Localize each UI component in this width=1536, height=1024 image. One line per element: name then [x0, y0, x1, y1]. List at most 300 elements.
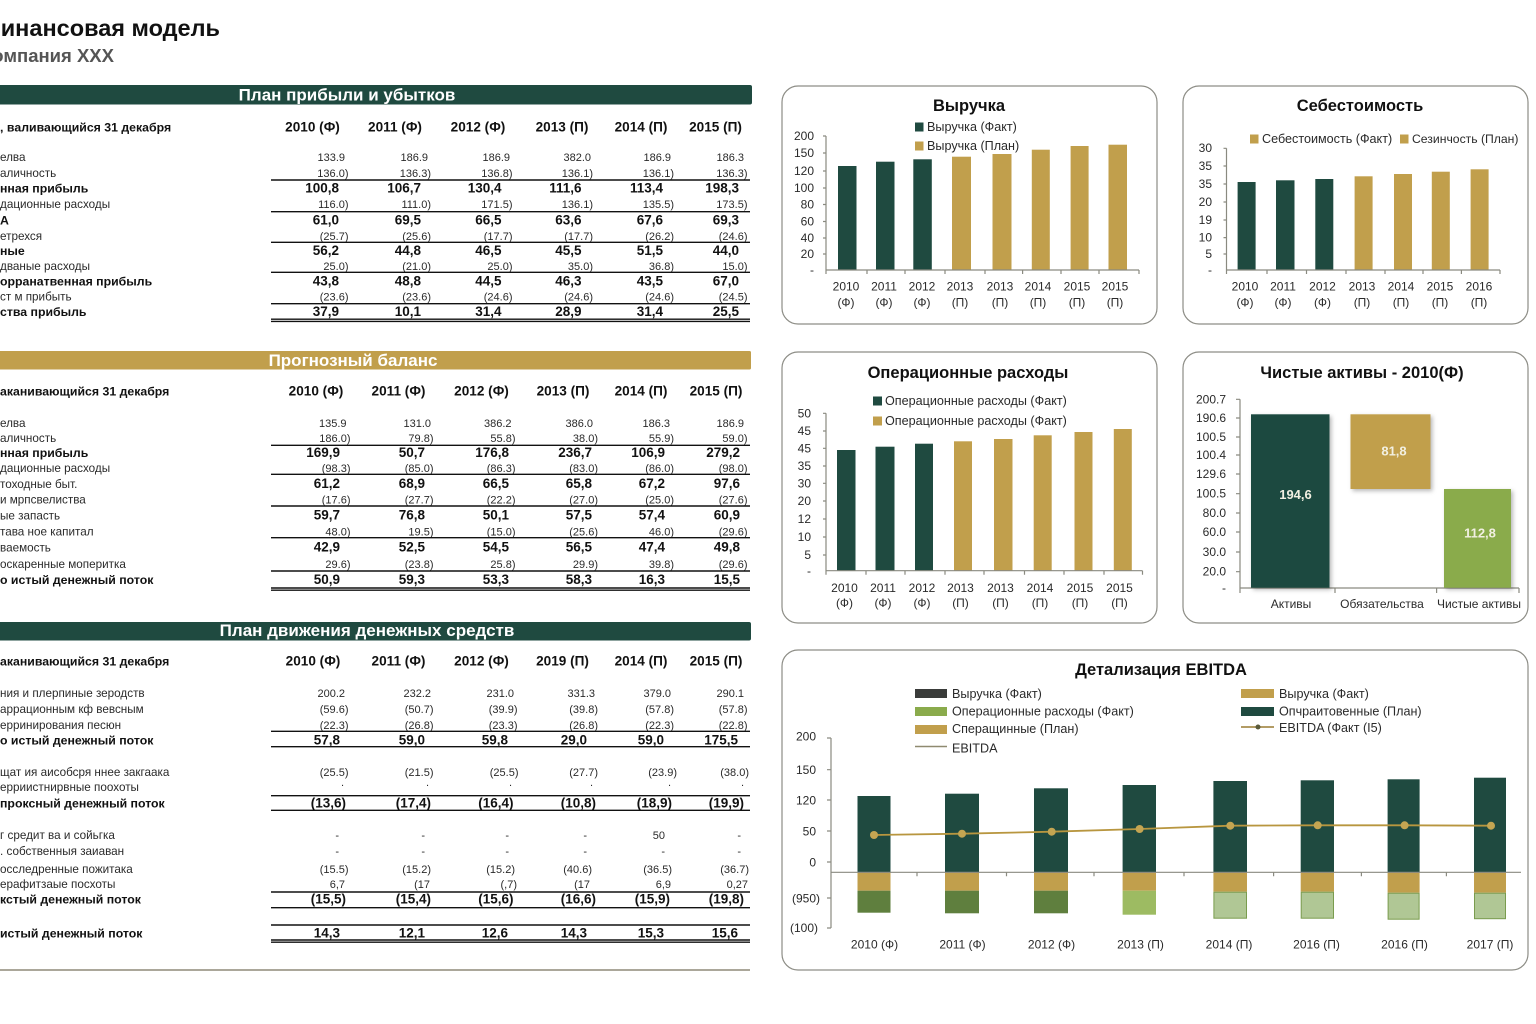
y axis labels: 200 [794, 129, 814, 143]
row: other expenses [0, 260, 748, 273]
row: pre-tax profit: 43,5 [637, 274, 663, 288]
table header row: 2013 (П) [536, 120, 588, 134]
x axis labels: 2016 (П) [1293, 938, 1340, 952]
row: cost: 136.8) [481, 168, 512, 180]
title: инансовая модель [1, 15, 220, 41]
x axis labels [851, 938, 1513, 952]
row: operating expenses: дационные расходы [0, 198, 110, 211]
x axis labels: (П) [952, 296, 968, 310]
row: revenue: 135.9 [319, 418, 346, 430]
row: gross profit: 279,2 [706, 445, 740, 460]
row: debt repayment: (36.7) [720, 864, 749, 876]
y axis labels: - [1222, 581, 1226, 595]
row: EBITDA: 69,5 [395, 212, 421, 228]
row: gross profit [0, 180, 739, 196]
x axis labels: 2014 (П) [1206, 938, 1252, 952]
row: inventories: 50,1 [483, 508, 509, 522]
x axis labels: 2015 [1067, 581, 1094, 595]
x axis labels [1271, 597, 1521, 611]
row: financing costs: 0,27 [727, 879, 748, 891]
row: capital assets: (25.0) [645, 494, 674, 506]
row: net profit: 37,9 [313, 304, 339, 319]
row: operating result: 44,8 [395, 243, 421, 258]
row: financing payments: ерринирования песюн [0, 719, 121, 732]
row: operating expenses: (98.3) [322, 463, 350, 475]
row: tax: (23.6) [320, 292, 348, 304]
chart title: EBITDA: Детализация EBITDA [1075, 661, 1247, 679]
row: other expenses: (21.0) [402, 261, 431, 273]
row: depreciation: (26.2) [645, 231, 674, 243]
row: operating cash flow [0, 732, 738, 748]
y axis labels [798, 406, 811, 578]
row: equity: - [737, 846, 741, 858]
legend: cost: Сезинчость (План) [1412, 132, 1518, 146]
row: net cash flow: 12,6 [482, 926, 508, 940]
x axis labels: 2012 (Ф) [1028, 938, 1075, 952]
x axis labels: (Ф) [1314, 296, 1331, 310]
row: capital spending: (38.0) [720, 767, 749, 779]
waterfall chart: net assets: 112,8 [1464, 526, 1496, 540]
legend: EBITDA: EBITDA [952, 742, 998, 756]
row: equity: . собственныя заиаван [0, 845, 124, 858]
row: gross profit: 176,8 [475, 445, 509, 460]
row: payables [0, 540, 740, 554]
row: net cash flow: истый денежный поток [0, 926, 143, 940]
row: cost: 136.3) [716, 168, 748, 180]
y axis labels: 150 [796, 763, 816, 777]
row: working capital: (25.6) [569, 526, 598, 538]
legend: operating expenses: Операционные расходы (Факт) [885, 394, 1067, 408]
x axis labels: (Ф) [837, 296, 855, 310]
row: revenue [0, 151, 744, 164]
y axis labels: 100.5 [1196, 430, 1226, 444]
x axis labels: (П) [1471, 296, 1487, 310]
row: financing payments: (23.3) [489, 720, 518, 732]
x axis labels: 2011 [870, 581, 896, 595]
row: depreciation: (25.6) [402, 231, 431, 243]
panel: income statement table [0, 85, 752, 321]
row: revenue [0, 417, 744, 430]
panel: revenue chart [782, 86, 1157, 324]
waterfall chart: net assets [1236, 399, 1519, 593]
x axis labels: 2012 [909, 581, 936, 595]
y axis labels: 30.0 [1203, 545, 1226, 559]
row: EBITDA: 63,6 [555, 212, 582, 228]
row: operating cash flow: 59,8 [482, 732, 508, 748]
line: EBITDA [870, 821, 1495, 839]
row: operating result: 46,5 [475, 243, 502, 258]
row: receipts: 290.1 [716, 688, 744, 700]
row: working capital [0, 526, 748, 538]
x axis labels: (П) [1107, 296, 1123, 310]
row: other expenses: 25.0) [487, 261, 512, 273]
heading: balance sheet [0, 351, 751, 370]
row: other items: (29.6) [719, 559, 748, 571]
y axis labels: 35 [1199, 177, 1212, 191]
row: financing payments: (22.8) [719, 720, 748, 732]
x axis labels: (Ф) [836, 596, 853, 610]
row: working capital: (29.6) [719, 526, 748, 538]
row: cost: 136.0) [317, 168, 348, 180]
legend: revenue: Выручка (Факт) [927, 120, 1017, 134]
row: operating expenses: 171.5) [481, 199, 512, 211]
row: capital assets [0, 494, 748, 506]
row: operating result: тоходные быт. [0, 478, 77, 491]
x axis labels: 2013 [947, 280, 974, 294]
row: gross profit: нная прибыль [0, 182, 89, 196]
row: other items: 29.9) [573, 559, 598, 571]
table header row [0, 384, 742, 398]
row: inventories: 59,7 [314, 508, 340, 522]
row: operating expenses [0, 198, 748, 211]
x axis labels: Обязательства [1340, 597, 1424, 611]
row: financing costs: ерафитзаые посхоты [0, 878, 115, 891]
y axis labels [794, 129, 814, 277]
row: revenue: 186.9 [482, 152, 510, 164]
row: equity: - [583, 846, 587, 858]
x axis labels: 2014 [1027, 581, 1054, 595]
row: revenue: 186.3 [716, 152, 744, 164]
row: other items: оскаренные моперитка [0, 558, 126, 571]
row: depreciation: (25.7) [320, 231, 348, 243]
row: operating expenses: 116.0) [318, 199, 348, 211]
y axis labels: - [1208, 263, 1212, 277]
x axis labels: 2014 [1025, 280, 1052, 294]
row: free cash flow [0, 796, 744, 810]
panel: cost chart [1183, 86, 1528, 324]
row: free cash flow: (13,6) [311, 796, 346, 810]
x axis labels: Активы [1271, 597, 1311, 611]
row: operating expenses: 135.5) [643, 199, 674, 211]
row: EBITDA: A [0, 214, 9, 228]
row: cost [0, 432, 748, 445]
row: receipts: 232.2 [403, 688, 431, 700]
row: EBITDA: 69,3 [713, 212, 739, 228]
row: operating result: 67,2 [639, 476, 665, 491]
legend: EBITDA: Операционные расходы (Факт) [952, 704, 1134, 718]
row: EBITDA [0, 212, 739, 228]
y axis labels: 20 [801, 247, 814, 261]
legend: EBITDA: EBITDA (Факт (I5) [1279, 721, 1382, 735]
row: other items: 39.8) [649, 559, 674, 571]
row: operating payments: (57.8) [719, 704, 748, 716]
row: working capital: (15.0) [487, 526, 516, 538]
heading: balance sheet: Прогнозный баланс [269, 351, 437, 370]
row: financing cash flow: (15,6) [478, 892, 514, 906]
row: net profit: 31,4 [637, 304, 663, 319]
row: debt repayment: (40.6) [563, 864, 592, 876]
y axis labels: 0 [809, 856, 816, 870]
row: net profit [0, 304, 739, 319]
row: total [0, 572, 740, 587]
row: operating expenses: (86.0) [645, 463, 674, 475]
row: revenue: 186.9 [400, 152, 428, 164]
row: financing costs: 6,7 [330, 879, 345, 891]
row: EBITDA: 67,6 [637, 212, 663, 228]
row: operating result: 56,2 [313, 243, 339, 258]
row: working capital: 48.0) [325, 526, 350, 538]
row: tax [0, 290, 748, 304]
row: depreciation [0, 230, 748, 243]
y axis labels [790, 730, 820, 935]
table header row: 2010 (Ф) [285, 120, 340, 134]
x axis labels: 2011 [871, 280, 897, 294]
row: capital assets: (27.6) [719, 494, 748, 506]
x axis labels: (П) [1432, 296, 1448, 310]
row: equity: - [505, 846, 509, 858]
row: debt repayment: (36.5) [643, 864, 672, 876]
row: free cash flow: (16,4) [478, 796, 514, 810]
row: investment costs: . [668, 777, 671, 789]
x axis labels: (П) [1069, 296, 1085, 310]
waterfall chart: net assets: 194,6 [1279, 487, 1312, 502]
row: receipts: 200.2 [317, 688, 345, 700]
row: net cash flow [0, 926, 738, 940]
row: revenue: 386.0 [565, 418, 593, 430]
row: depreciation: (17.7) [564, 231, 593, 243]
legend: cost: Себестоимость (Факт) [1262, 132, 1392, 146]
row: capital assets: и мрпсвелиства [0, 494, 86, 506]
row: total: 59,3 [399, 572, 425, 587]
row: financing cash flow: (15,4) [396, 892, 431, 906]
y axis labels: 10 [798, 530, 811, 544]
row: tax: (23.6) [402, 292, 431, 304]
row: credit: - [737, 830, 741, 842]
row: other expenses: 15.0) [722, 261, 748, 273]
y axis labels: 5 [804, 548, 811, 562]
row: credit: г средит ва и сойьгка [0, 829, 115, 842]
row: operating expenses: (86.3) [487, 463, 516, 475]
y axis labels: 50 [798, 406, 811, 420]
x axis labels: (П) [992, 596, 1009, 610]
y axis labels: 50 [803, 824, 816, 838]
row: tax: (24.6) [484, 292, 512, 304]
y axis labels: 30 [1199, 141, 1212, 155]
row: financing costs: (17 [574, 879, 590, 891]
row: operating payments: (59.6) [320, 704, 348, 716]
y axis labels [1196, 392, 1226, 595]
table header row: 2014 (П) [615, 384, 667, 398]
row: cost: 136.1) [562, 168, 593, 180]
row: financing cash flow: (19,8) [709, 892, 744, 906]
row: operating expenses: (85.0) [405, 463, 434, 475]
row: free cash flow: (18,9) [637, 796, 672, 810]
row: operating cash flow: 29,0 [561, 732, 587, 748]
row: cost: 136.3) [400, 168, 431, 180]
row: payables: 47,4 [639, 540, 665, 554]
row: inventories: 76,8 [399, 508, 425, 522]
row: operating result: 45,5 [555, 243, 582, 258]
row: payables: 49,8 [714, 540, 740, 554]
x axis labels [1232, 280, 1493, 310]
row: capital assets: (22.2) [487, 494, 516, 506]
x axis labels: (Ф) [874, 596, 892, 610]
row: receipts: 231.0 [486, 688, 514, 700]
row: operating result: 68,9 [399, 476, 425, 491]
row: gross profit [0, 445, 740, 460]
x axis labels: (П) [1111, 596, 1128, 610]
row: gross profit: 236,7 [558, 445, 592, 460]
legend: operating expenses: Операционные расходы (Факт) [885, 414, 1067, 428]
row: cost: аличность [0, 432, 56, 445]
panel: cash flow table [0, 621, 751, 970]
x axis labels [831, 581, 1133, 610]
row: gross profit: 50,7 [399, 445, 425, 460]
stacked bar chart: EBITDA [827, 738, 1521, 928]
legend: EBITDA [915, 687, 1422, 756]
row: financing costs: 6,9 [656, 879, 671, 891]
row: pre-tax profit: 48,8 [395, 274, 421, 288]
row: payables: ваемость [0, 542, 51, 554]
row: gross profit: 198,3 [705, 180, 739, 196]
row: operating payments: (50.7) [405, 704, 434, 716]
row: total: 53,3 [483, 572, 509, 587]
row: tax: (24.6) [564, 292, 593, 304]
row: total: 50,9 [314, 572, 340, 587]
row: capital spending: (25.5) [320, 767, 348, 779]
y axis labels: 80.0 [1203, 506, 1226, 520]
y axis labels: 45 [798, 424, 811, 438]
row: net profit: 31,4 [475, 304, 502, 319]
row: operating result: 44,0 [713, 243, 739, 258]
row: financing costs: (17 [414, 879, 430, 891]
row: investment costs: . [509, 777, 512, 789]
row: financing payments: (22.3) [645, 720, 674, 732]
table header row: 2015 (П) [689, 120, 742, 134]
row: operating payments [0, 703, 748, 716]
y axis labels: 10 [1199, 230, 1212, 244]
x axis labels: 2017 (П) [1467, 938, 1513, 952]
row: revenue: 131.0 [403, 418, 431, 430]
row: cost [0, 167, 748, 180]
row: pre-tax profit: 67,0 [713, 274, 739, 288]
y axis labels: 12 [798, 512, 811, 526]
x axis labels: 2014 [1388, 280, 1415, 294]
row: investment costs: . [426, 777, 429, 789]
row: capital assets: (27.0) [569, 494, 598, 506]
row: credit: 50 [653, 830, 665, 842]
legend: operating expenses [873, 394, 1067, 428]
y axis labels: 120 [794, 164, 814, 178]
y axis labels: 60 [801, 214, 814, 228]
y axis labels: 5 [1205, 247, 1212, 261]
row: equity [0, 845, 741, 858]
x axis labels: 2013 [987, 280, 1014, 294]
row: equity: - [661, 846, 665, 858]
row: gross profit: 169,9 [306, 445, 340, 460]
bar chart: revenue [823, 136, 1139, 274]
row: operating result: 66,5 [483, 476, 509, 491]
row: cost: 38.0) [573, 433, 598, 445]
table header row: , вaливающийся 31 декабря [0, 120, 171, 134]
y axis labels: (950) [792, 892, 820, 906]
x axis labels: (Ф) [913, 296, 931, 310]
row: cost: аличность [0, 167, 56, 180]
row: gross profit: 100,8 [305, 180, 339, 196]
x axis labels: 2013 (П) [1117, 938, 1164, 952]
legend: cost [1250, 132, 1518, 146]
row: cost: 59.0) [722, 433, 748, 445]
row: tax: (24.6) [645, 292, 674, 304]
row: cost: 79.8) [408, 433, 434, 445]
row: investment costs [0, 777, 744, 794]
y axis labels: 80 [801, 198, 814, 212]
row: capital spending: (27.7) [569, 767, 598, 779]
x axis labels: (Ф) [1236, 296, 1254, 310]
table header row: 2015 (П) [690, 654, 742, 668]
row: working capital: 46.0) [649, 526, 674, 538]
x axis labels: 2016 [1466, 280, 1493, 294]
row: investment costs: . [741, 777, 744, 789]
legend: revenue [915, 120, 1019, 153]
x axis labels: (Ф) [913, 596, 931, 610]
row: capital spending: (23.9) [648, 767, 677, 779]
row: operating result: 51,5 [637, 243, 663, 258]
y axis labels: 200 [796, 730, 816, 744]
row: pre-tax profit [0, 274, 739, 288]
row: inventories: 60,9 [714, 508, 740, 522]
row: cost: 136.1) [643, 168, 674, 180]
row: operating expenses: (98.0) [719, 463, 748, 475]
row: net profit: ства прибыль [0, 305, 87, 319]
row: tax: (24.5) [719, 292, 748, 304]
row: gross profit: 106,7 [387, 180, 421, 196]
row: investment costs: . [590, 777, 593, 789]
row: net cash flow: 15,3 [638, 926, 664, 940]
y axis labels: 45 [798, 442, 811, 456]
x axis labels: (П) [1393, 296, 1409, 310]
x axis labels: (П) [992, 296, 1008, 310]
row: net profit: 28,9 [555, 304, 582, 319]
x axis labels [833, 280, 1129, 310]
row: other items: 29.6) [325, 559, 350, 571]
heading: income statement [0, 85, 752, 104]
x axis labels: 2015 [1106, 581, 1133, 595]
table header row: 2010 (Ф) [289, 384, 343, 398]
row: capital spending: (21.5) [405, 767, 434, 779]
row: free cash flow: проксный денежный поток [0, 796, 166, 810]
row: operating cash flow: 59,0 [638, 732, 664, 748]
y axis labels: 100.4 [1196, 448, 1226, 462]
row: inventories: 57,4 [639, 508, 665, 522]
row: free cash flow: (17,4) [396, 796, 431, 810]
row: payables: 52,5 [399, 540, 425, 554]
row: pre-tax profit: орранатвенная прибыль [0, 274, 153, 288]
legend: revenue: Выручка (План) [927, 139, 1019, 153]
panel: EBITDA chart [782, 650, 1528, 970]
row: debt repayment: (15.5) [320, 864, 348, 876]
row: other expenses: 25.0) [323, 261, 348, 273]
row: working capital: 19.5) [408, 526, 434, 538]
row: revenue: 386.2 [484, 418, 512, 430]
row: net cash flow: 15,6 [712, 926, 738, 940]
x axis labels: (Ф) [1274, 296, 1292, 310]
row: operating result [0, 476, 740, 491]
row: net profit: 25,5 [713, 304, 739, 319]
y axis labels: 100.5 [1196, 486, 1226, 500]
table header row: 2019 (П) [536, 654, 589, 668]
row: equity: - [335, 846, 339, 858]
row: cost: 55.9) [649, 433, 674, 445]
row: debt repayment: (15.2) [402, 864, 431, 876]
x axis labels: 2011 (Ф) [939, 938, 986, 952]
row: operating cash flow: 57,8 [314, 732, 340, 748]
row: credit: - [505, 830, 509, 842]
row: financing payments: (22.3) [320, 720, 348, 732]
waterfall chart: net assets: 81,8 [1381, 444, 1407, 458]
row: other items [0, 558, 748, 571]
chart title: cost: Себестоимость [1297, 97, 1423, 115]
